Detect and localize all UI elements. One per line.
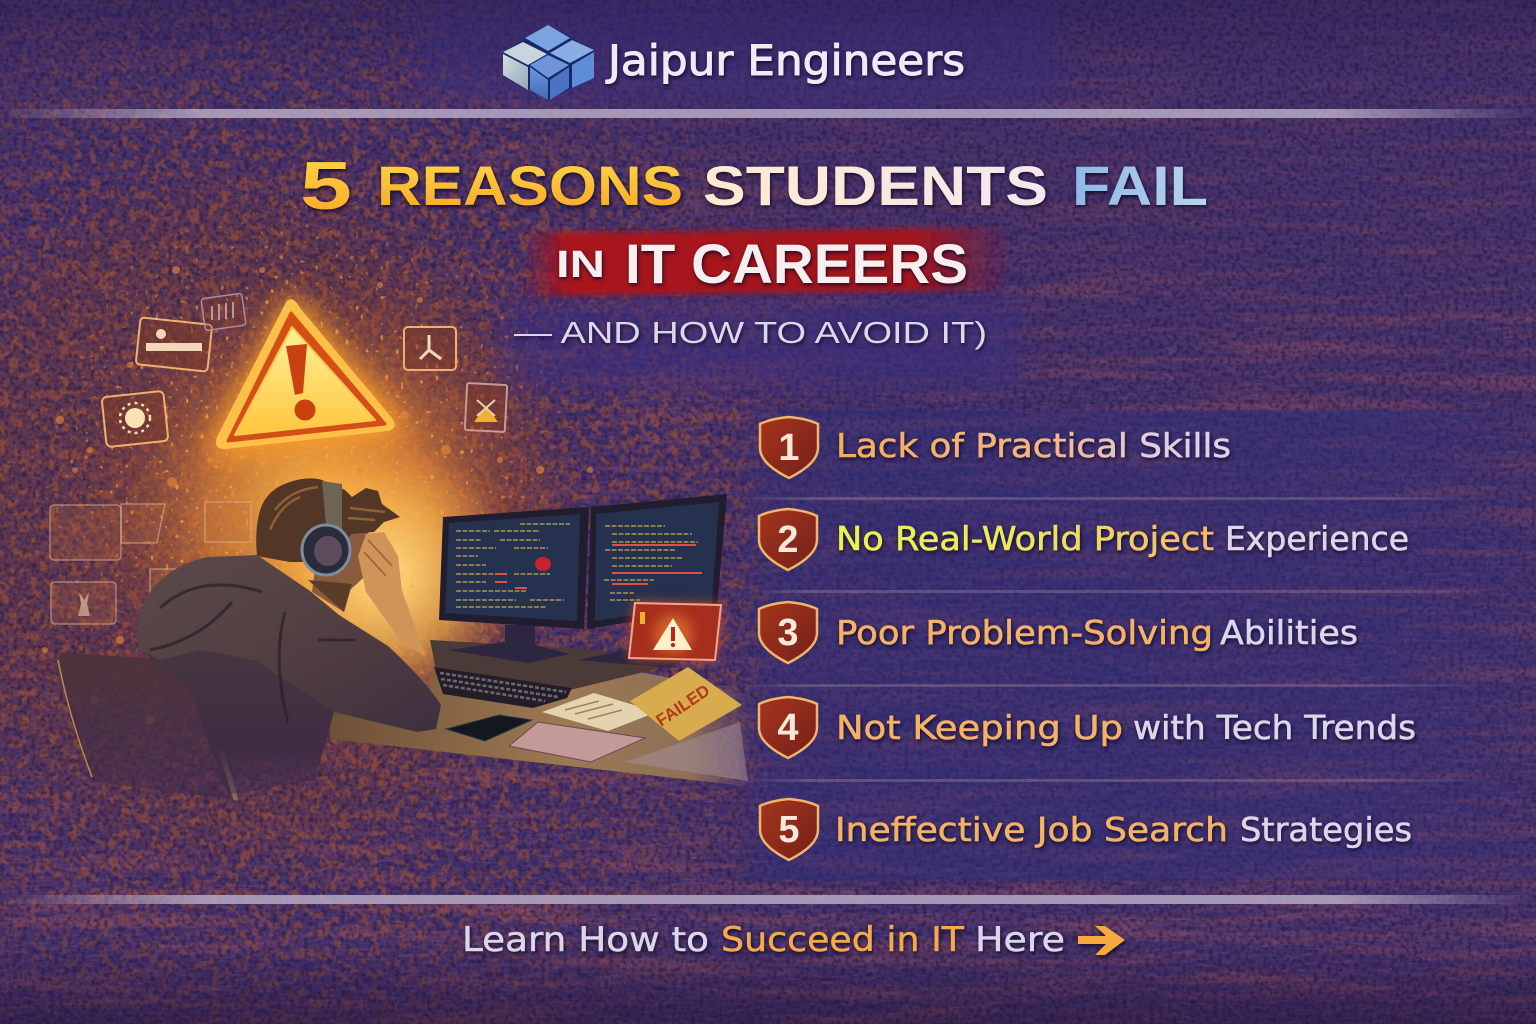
top divider rule [0,109,1536,118]
badge 3 [759,602,817,663]
warning triangle [205,290,410,458]
monitor stands [448,625,700,668]
icon: blue isometric cube logo [503,25,594,100]
floating icons around the warning [50,293,507,624]
hair [256,478,400,562]
badge 3: 3 [777,612,799,654]
reason 3 [759,602,1358,663]
headline: 5 reasons students fail: STUDENTS [703,154,1048,217]
alert panel [629,603,721,660]
subtitle: — AND HOW TO AVOID IT) [514,315,987,350]
reason 5 text: Strategies [1240,810,1412,849]
note paper [542,693,657,731]
reason 5 text [835,810,1412,849]
headline: 5 reasons students fail: REASONS [377,154,683,217]
icon: faded figure [78,592,90,616]
panel: reasons list [735,410,1536,880]
arrow [1078,926,1125,955]
headline: in IT careers: IN [556,244,605,286]
reason 5 [760,799,1412,860]
reason 4 text [836,708,1416,747]
desk papers and phone: FAILED [653,681,713,730]
headline: in IT careers: IT CAREERS [625,232,968,295]
reason 3 text: Abilities [1220,613,1358,652]
reason 1 [760,417,1231,478]
reason 4 text: with Tech Trends [1133,708,1416,747]
headphones [302,481,350,575]
desk [330,640,760,786]
logo: Jaipur Engineers [503,25,965,100]
reason 4 [759,697,1416,758]
bottom divider rule [0,895,1536,904]
forearm and hand [358,532,426,657]
smartphone [446,715,532,741]
icon: hourglass card [465,383,507,432]
list background [735,410,1536,880]
hoodie body [140,600,334,795]
reason 2 text: No Real-World Project [836,519,1214,558]
reason 5 text: Ineffective Job Search [835,810,1228,849]
left monitor [439,507,589,629]
badge 2 [759,509,817,570]
headline: 5 reasons students fail [300,148,1208,224]
badge 1 [760,417,818,478]
orange glow and sparks [10,170,593,748]
reason 4 text: Not Keeping Up [836,708,1123,747]
headline: 5 reasons students fail: 5 [300,148,352,224]
icon: chart card [201,293,246,331]
student [138,478,441,795]
monitors [439,494,727,668]
icon: gear card [102,391,168,447]
desk papers and phone [446,667,748,781]
badge 2: 2 [777,519,799,561]
badge 5 [760,799,818,860]
exclamation mark [286,344,316,420]
keyboard [434,667,572,708]
reason 2 text: Experience [1225,519,1409,558]
face and beard [312,530,372,612]
badge 1: 1 [778,427,800,469]
red banner highlight [520,228,1012,296]
reason 2 text [836,519,1409,558]
icon: figure card [404,327,456,370]
call to action [462,920,1125,960]
headline: 5 reasons students fail: FAIL [1072,154,1208,217]
row dividers [735,497,1495,782]
faded interface frames [50,502,251,624]
failed paper [630,667,742,741]
logo wordmark: Jaipur Engineers [605,36,965,85]
reason 1 text: Lack of Practical Skills [836,426,1231,465]
call to action text: Here [975,920,1065,960]
scattered document [625,722,748,781]
reason 2 [759,509,1409,570]
badge 4 [759,697,817,758]
badge 4: 4 [777,707,799,749]
call to action text [462,920,1065,960]
hood and shoulders [138,555,441,732]
call to action text: Succeed in IT [721,920,964,960]
title block [300,148,1208,350]
chair [58,652,236,800]
badge 5: 5 [778,809,800,851]
pink notebook [509,722,645,762]
right monitor [587,494,727,629]
reason 3 text: Poor Problem-Solving [836,613,1213,652]
illustration: stressed student at desk [10,170,749,801]
reason 3 text [836,613,1358,652]
icon: toolbar card [136,317,212,372]
call to action text: Learn How to [462,920,709,960]
